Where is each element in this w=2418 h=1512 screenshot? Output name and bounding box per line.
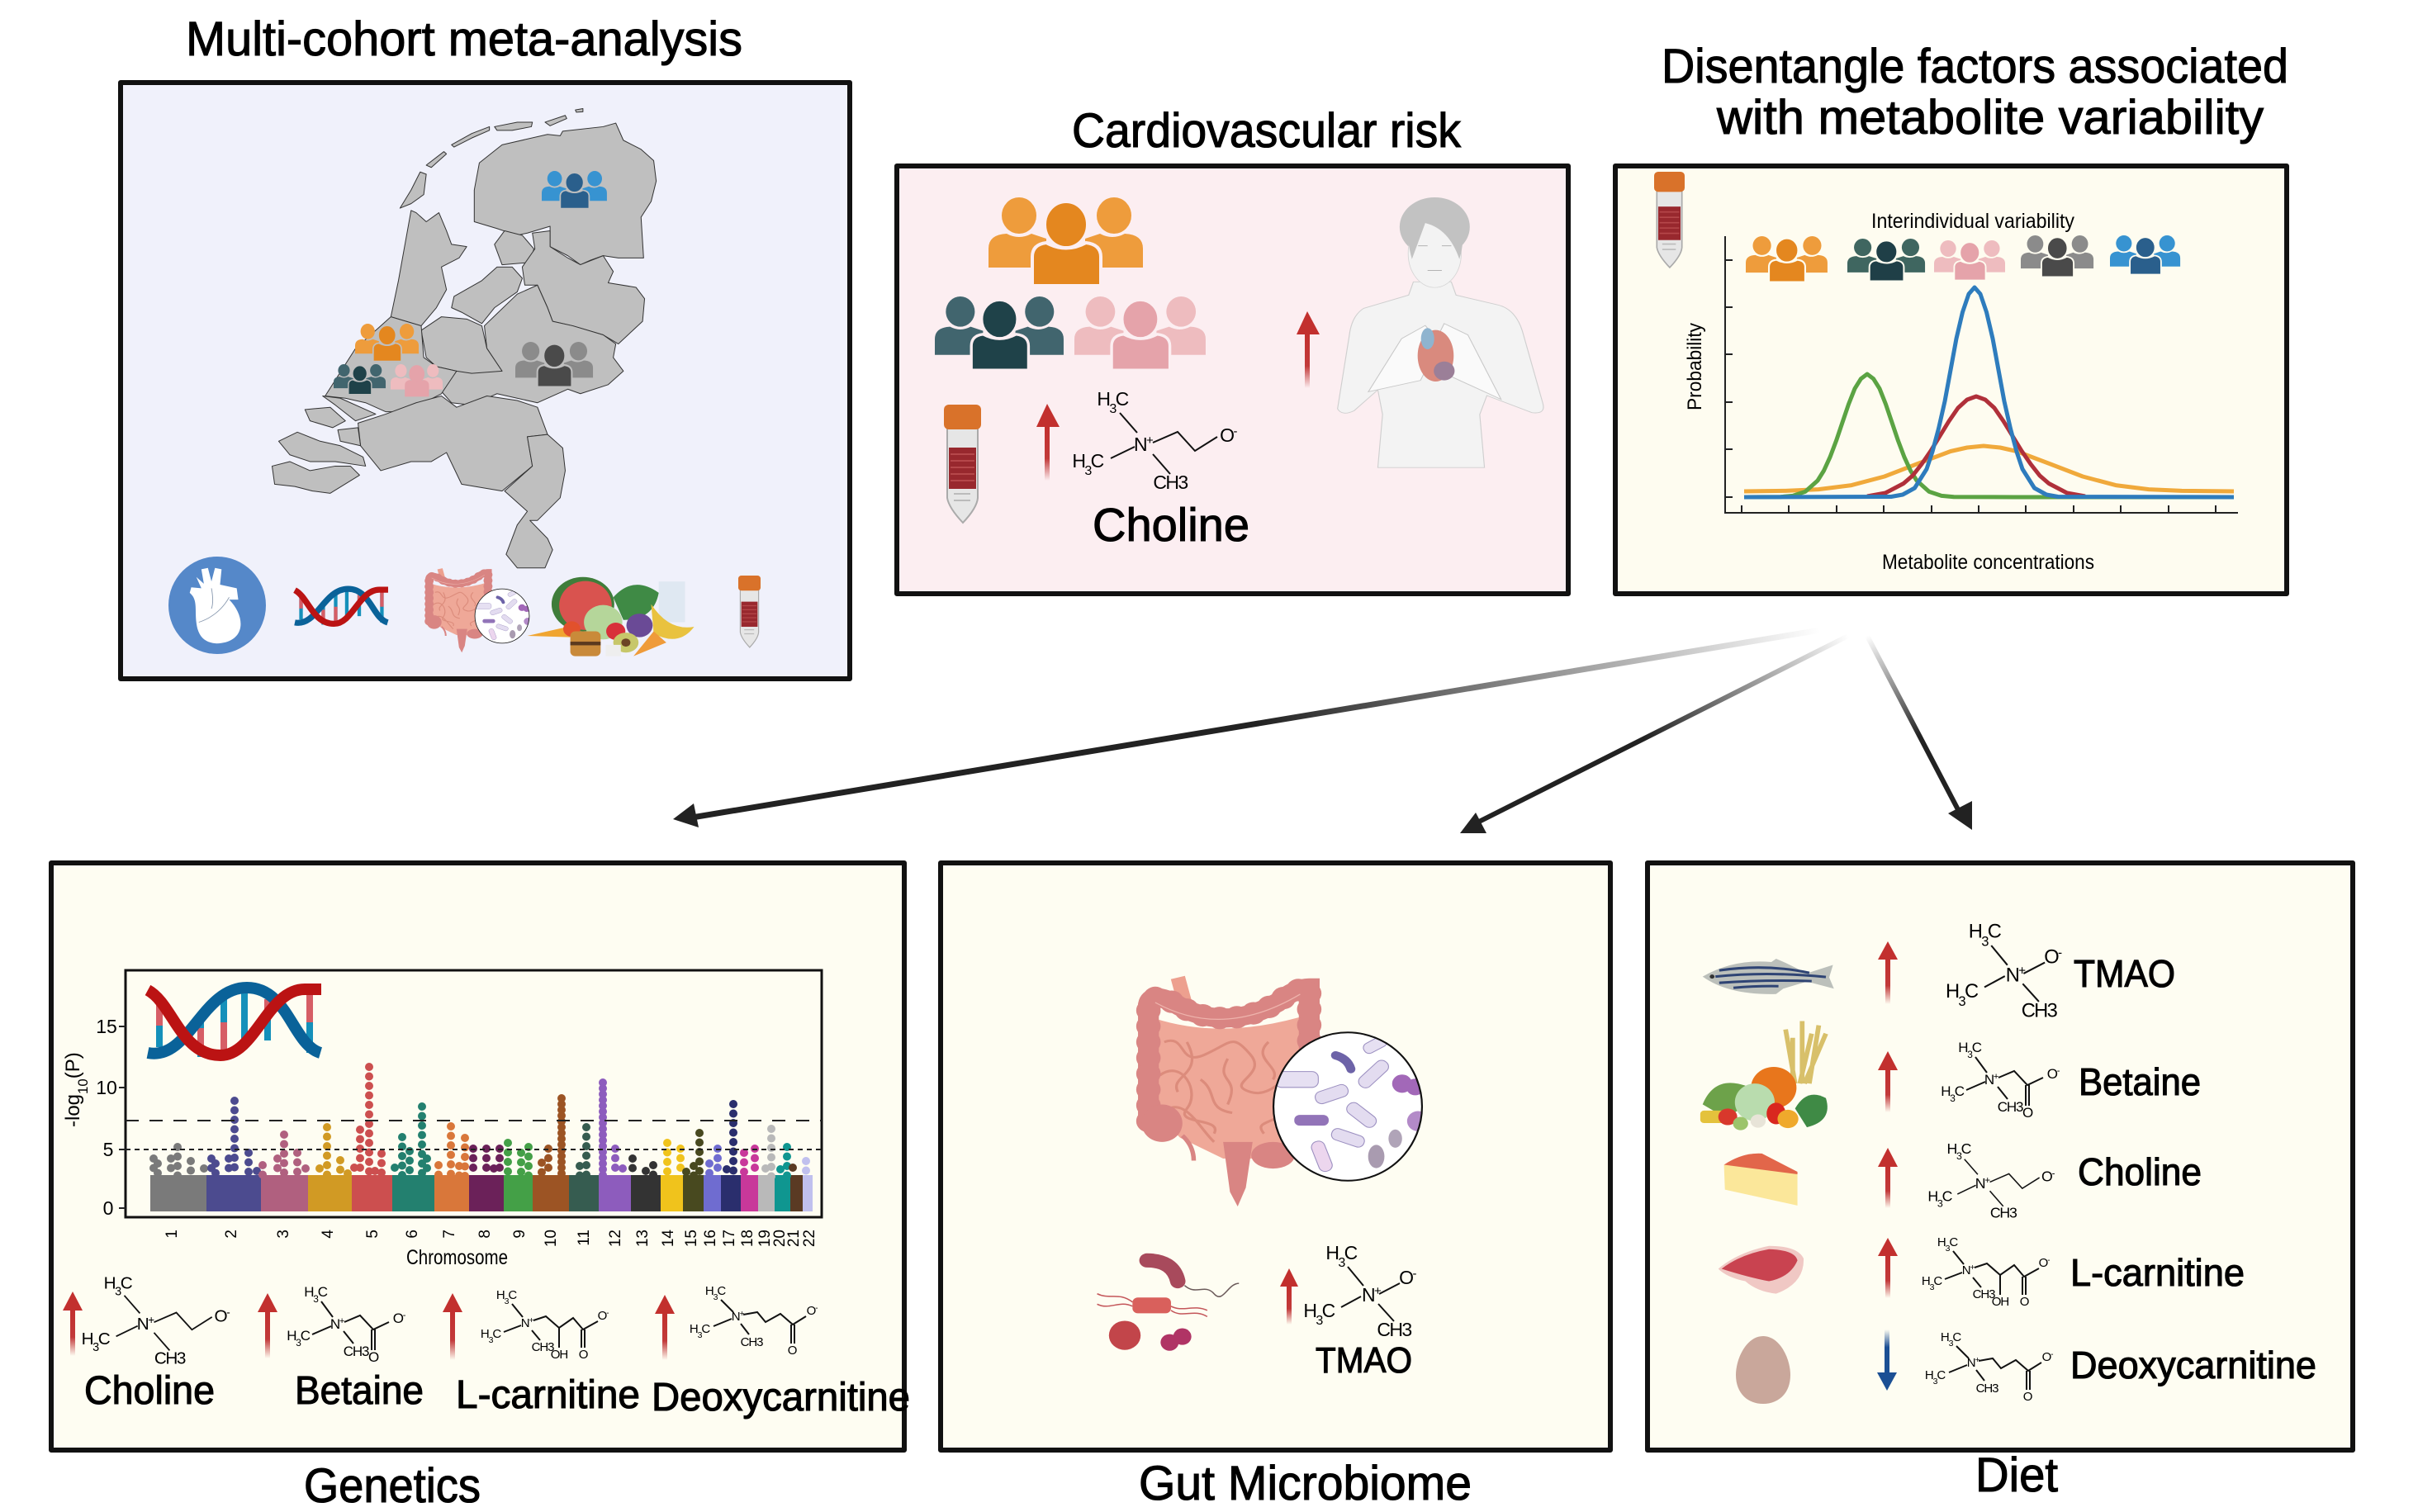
y tick labels: 5 <box>103 1139 113 1160</box>
genetics: molecule l-carnitine: O <box>579 1348 588 1362</box>
genetics: label l-carnitine: L-carnitine <box>456 1373 640 1417</box>
diet: molecule deoxycarnitine: CH3 <box>1976 1382 1998 1396</box>
diet: arrow deoxycarnitine down <box>1877 1330 1897 1391</box>
diet: arrow TMAO <box>1878 941 1898 1004</box>
molecule: TMAO: N+ <box>1362 1283 1381 1306</box>
diet: molecule l-carnitine: H3C <box>1922 1274 1942 1292</box>
icon: blood tube on variability panel <box>1654 172 1685 268</box>
genetics: molecule l-carnitine: OH <box>551 1348 567 1362</box>
chromosome labels: 11 <box>576 1230 593 1246</box>
genetics: molecule betaine: CH3 <box>344 1344 369 1359</box>
genetics: molecule betaine: H3C <box>304 1284 328 1305</box>
molecule: TMAO <box>1303 1242 1416 1340</box>
genetics: molecule betaine: H3C <box>287 1328 311 1348</box>
y tick labels <box>96 1016 117 1219</box>
genetics: molecule choline: N+ <box>137 1314 154 1334</box>
genetics: molecule l-carnitine: H3C <box>496 1288 517 1306</box>
molecule: TMAO: H3C <box>1325 1242 1358 1270</box>
icon: fish <box>1703 959 1834 994</box>
chromosome labels: 10 <box>543 1230 560 1247</box>
diet: label TMAO: TMAO <box>2074 952 2175 995</box>
diet: molecule l-carnitine: O- <box>2039 1255 2050 1270</box>
genetics: molecule choline: H3C <box>104 1274 133 1299</box>
arrow: to genetics <box>673 630 1820 827</box>
diet: arrow l-carnitine <box>1878 1238 1898 1298</box>
molecule: choline: H3C <box>1097 388 1129 416</box>
y axis label: -log10(P) <box>62 1052 91 1127</box>
arrow: to gut microbiome <box>1460 636 1848 833</box>
diet: molecule l-carnitine: N+ <box>1962 1263 1975 1277</box>
diet: label deoxycarnitine: Deoxycarnitine <box>2070 1344 2316 1386</box>
genetics: molecule choline: O- <box>215 1306 230 1325</box>
cohort icon: orange on map <box>355 324 419 362</box>
genetics: molecule deoxycarnitine: CH3 <box>741 1335 763 1349</box>
icon: DNA <box>295 589 388 624</box>
cohort icon: gray on map <box>515 342 593 387</box>
icon: vegetables and grain <box>1700 1021 1828 1130</box>
title: genetics: Genetics <box>304 1459 481 1512</box>
diet: arrow betaine <box>1878 1051 1898 1112</box>
panel: gut microbiome <box>941 863 1610 1450</box>
chromosome labels: 7 <box>441 1230 458 1239</box>
chromosome labels: 13 <box>634 1230 652 1247</box>
molecule: TMAO: CH3 <box>1377 1319 1411 1340</box>
molecule: TMAO: O- <box>1399 1267 1416 1288</box>
cohort icon: dark large <box>935 296 1064 370</box>
genetics: arrow choline <box>63 1292 83 1356</box>
chromosome labels: 18 <box>739 1230 756 1247</box>
diet: molecule l-carnitine: H3C <box>1937 1235 1958 1254</box>
chromosome labels: 12 <box>607 1230 624 1247</box>
density chart <box>1725 236 2238 513</box>
chromosome labels: 21 <box>785 1230 803 1247</box>
diet: molecule TMAO <box>1946 922 2062 1022</box>
molecule: choline: O- <box>1220 424 1237 446</box>
diet: molecule betaine <box>1941 1040 2060 1121</box>
genetics: molecule choline: CH3 <box>154 1349 186 1368</box>
genetics: molecule deoxycarnitine: N+ <box>732 1310 745 1324</box>
chromosome labels: 16 <box>702 1230 719 1247</box>
chromosome labels: 5 <box>364 1230 382 1239</box>
chromosome labels: 14 <box>660 1230 677 1247</box>
chromosome labels <box>164 1230 818 1247</box>
diet: molecule l-carnitine: CH3 <box>1973 1287 1995 1301</box>
diet: molecule TMAO: CH3 <box>2022 1001 2058 1022</box>
genetics: molecule betaine: N+ <box>330 1316 344 1332</box>
manhattan plot <box>62 970 822 1269</box>
genetics: molecule l-carnitine <box>481 1288 609 1362</box>
molecule: choline: CH3 <box>1153 472 1188 493</box>
diet: molecule TMAO: O- <box>2044 946 2062 969</box>
title: gut microbiome: Gut Microbiome <box>1139 1457 1472 1510</box>
diet: molecule deoxycarnitine <box>1925 1330 2053 1404</box>
icon: cheese <box>1724 1154 1798 1206</box>
chromosome labels: 9 <box>511 1230 529 1239</box>
chromosome labels: 17 <box>721 1230 738 1247</box>
genetics: molecule l-carnitine: CH3 <box>532 1340 554 1354</box>
axis label: metabolite concentrations: Metabolite concentrations <box>1882 551 2094 574</box>
cohort icon: orange large <box>989 197 1143 286</box>
diet: molecule choline: H3C <box>1927 1188 1953 1210</box>
diet: molecule deoxycarnitine: H3C <box>1941 1330 1961 1348</box>
cohort icon: dark on map <box>334 364 386 395</box>
diet: label betaine: Betaine <box>2079 1060 2201 1103</box>
diet: molecule TMAO: N+ <box>2006 964 2026 986</box>
diet: molecule deoxycarnitine: O <box>2023 1390 2032 1404</box>
map of the Netherlands <box>273 109 657 568</box>
genetics: arrow l-carnitine <box>443 1293 462 1360</box>
diet: molecule l-carnitine <box>1922 1235 2050 1309</box>
y tick labels: 10 <box>96 1077 117 1098</box>
y tick labels: 15 <box>96 1016 117 1037</box>
chromosome labels: 2 <box>223 1230 240 1239</box>
diet: molecule choline: N+ <box>1975 1175 1990 1192</box>
chromosome labels: 6 <box>404 1230 421 1239</box>
genetics: label deoxycarnitine: Deoxycarnitine <box>652 1376 910 1420</box>
molecule: TMAO: H3C <box>1303 1300 1335 1328</box>
icon: heart <box>168 557 266 654</box>
diet: molecule choline: CH3 <box>1990 1205 2017 1221</box>
title: cardiovascular risk: Cardiovascular risk <box>1072 104 1462 158</box>
genetics: arrow deoxycarnitine <box>655 1295 675 1360</box>
chromosome labels: 20 <box>771 1230 789 1247</box>
chromosome labels: 4 <box>320 1230 337 1239</box>
diet: molecule betaine: CH3 <box>1998 1099 2023 1115</box>
icon: food <box>528 577 695 656</box>
diet: molecule l-carnitine: OH <box>1992 1295 2008 1309</box>
icon: blood tube on map panel <box>738 576 761 647</box>
cohort icons row <box>1746 235 2180 282</box>
y tick labels: 0 <box>103 1197 113 1219</box>
diet: molecule betaine: N+ <box>1984 1072 1998 1088</box>
arrow: up risk <box>1297 311 1320 388</box>
molecule: choline: N+ <box>1134 433 1153 455</box>
genetics: molecule l-carnitine: N+ <box>521 1316 534 1330</box>
icon: meat <box>1719 1246 1804 1294</box>
cohort icon: blue on map <box>542 171 607 209</box>
genetics: molecule deoxycarnitine: H3C <box>690 1322 710 1340</box>
chromosome labels: 19 <box>756 1230 774 1247</box>
diet: molecule betaine: H3C <box>1941 1083 1965 1104</box>
genetics: molecule deoxycarnitine: H3C <box>705 1284 726 1302</box>
diet: molecule deoxycarnitine: O- <box>2042 1349 2053 1364</box>
diet: molecule betaine: O <box>2022 1105 2033 1121</box>
diet: molecule betaine: H3C <box>1958 1040 1982 1060</box>
chromosome bars <box>150 1175 813 1211</box>
icon: gut with bacteria magnifier <box>1141 978 1429 1206</box>
genetics: molecule deoxycarnitine: O <box>788 1344 797 1358</box>
panel: metabolite variability <box>1615 166 2287 594</box>
molecule: choline: H3C <box>1072 450 1104 478</box>
diet: molecule deoxycarnitine: H3C <box>1925 1368 1946 1386</box>
diet: molecule betaine: O- <box>2047 1066 2060 1082</box>
label: TMAO: TMAO <box>1316 1340 1412 1381</box>
title: disentangle factors <box>1662 40 2288 145</box>
title: disentangle factors: Disentangle factors associated <box>1662 40 2288 93</box>
diet: molecule choline: O- <box>2041 1168 2055 1185</box>
diet: molecule choline: H3C <box>1946 1140 1972 1162</box>
panel: diet <box>1648 863 2353 1450</box>
genetics: molecule betaine: O- <box>393 1311 406 1326</box>
genetics: molecule deoxycarnitine <box>690 1284 818 1358</box>
icon: person holding heart <box>1338 197 1543 467</box>
diet: label l-carnitine: L-carnitine <box>2070 1251 2245 1294</box>
molecule: choline <box>1072 388 1237 493</box>
diet: molecule TMAO: H3C <box>1969 922 2002 949</box>
icon: egg <box>1736 1336 1790 1404</box>
title: disentangle factors: with metabolite variability <box>1716 91 2264 145</box>
diet: molecule deoxycarnitine: N+ <box>1967 1356 1980 1370</box>
association dots <box>154 1067 806 1177</box>
arrow: up choline <box>1036 404 1060 481</box>
cohort icon: pink on map <box>391 364 443 396</box>
icon: bacteria group <box>1098 1260 1239 1351</box>
cohort icon: pink large <box>1074 296 1206 370</box>
label: choline: Choline <box>1093 499 1249 552</box>
arrow: up TMAO <box>1280 1268 1298 1325</box>
chromosome labels: 1 <box>164 1230 181 1239</box>
genetics: molecule deoxycarnitine: O- <box>807 1303 818 1318</box>
icon: gut with bacteria <box>427 569 532 652</box>
genetics: molecule l-carnitine: O- <box>598 1308 609 1323</box>
chromosome labels: 22 <box>801 1230 818 1247</box>
axis label: probability: Probability <box>1684 323 1706 410</box>
chromosome labels: 15 <box>683 1230 700 1247</box>
panel: cardiovascular risk <box>897 166 1568 594</box>
chromosome labels: 3 <box>275 1230 292 1239</box>
genetics: molecule betaine <box>287 1284 406 1365</box>
genetics: arrow betaine <box>258 1293 277 1358</box>
arrow: to diet <box>1867 636 1972 830</box>
genetics: molecule betaine: O <box>368 1349 379 1365</box>
genetics: label betaine: Betaine <box>295 1369 424 1413</box>
panel: genetics <box>51 863 904 1450</box>
title: diet: Diet <box>1975 1448 2058 1502</box>
title: multi-cohort meta-analysis: Multi-cohort meta-analysis <box>186 12 742 66</box>
diet: molecule l-carnitine: O <box>2020 1295 2029 1309</box>
genetics: molecule choline: H3C <box>82 1330 111 1354</box>
chromosome labels: 8 <box>476 1230 494 1239</box>
genetics: molecule l-carnitine: H3C <box>481 1327 501 1345</box>
diet: label choline: Choline <box>2078 1150 2202 1193</box>
DNA icon <box>148 988 321 1057</box>
diet: arrow choline <box>1878 1148 1898 1208</box>
diet: molecule TMAO: H3C <box>1946 981 1979 1008</box>
genetics: molecule choline <box>82 1274 230 1368</box>
x axis label: Chromosome <box>406 1246 508 1269</box>
panel: multi-cohort map <box>121 83 850 679</box>
icon: blood tube <box>944 405 981 523</box>
label: interindividual variability: Interindividual variability <box>1871 210 2074 233</box>
diet: molecule choline <box>1927 1140 2055 1221</box>
genetics: label choline: Choline <box>84 1369 215 1413</box>
